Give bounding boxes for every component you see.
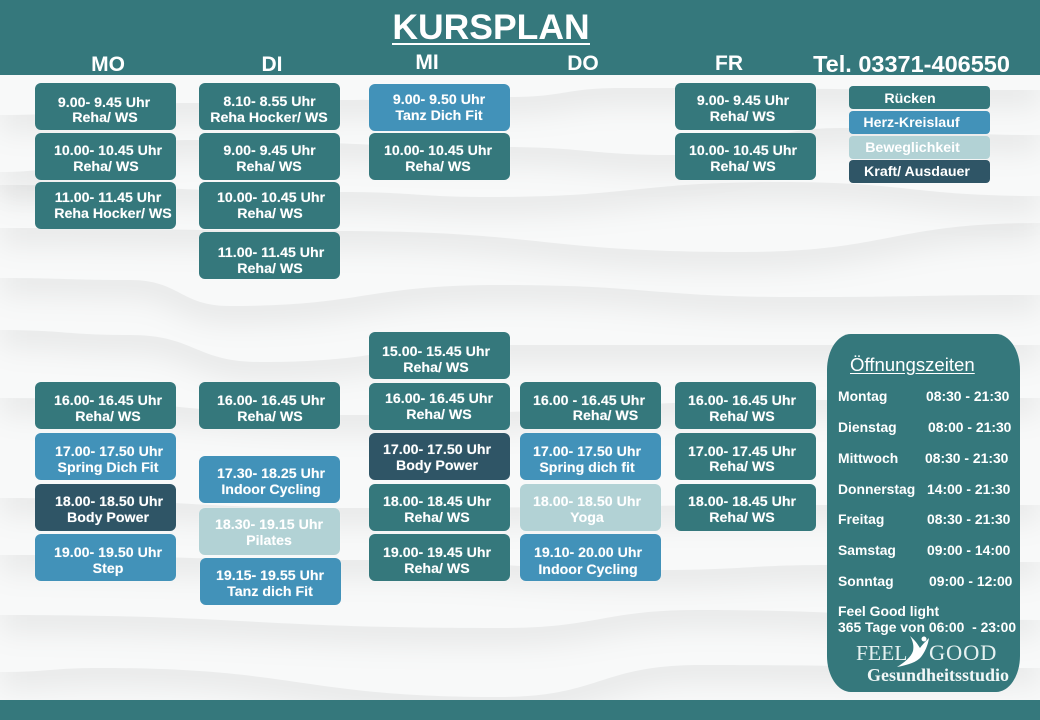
logo: Feel Good [856, 636, 1009, 685]
row: Dienstag [838, 419, 1011, 435]
card: Do 18.00 [520, 484, 660, 531]
card: Mo 19.00 [35, 534, 176, 581]
row: Mittwoch: Mittwoch [838, 450, 898, 466]
card: Mo 17.00: 17.00- 17.50 Uhr [55, 444, 163, 460]
card: Do 19.10: 19.10- 20.00 Uhr [534, 545, 642, 561]
card: Mo 9.00: Reha/ WS [72, 110, 138, 126]
row: Samstag: Samstag [838, 542, 896, 558]
card: Di 17.30 [199, 456, 340, 503]
legend: Kraft/ Ausdauer: Kraft/ Ausdauer [864, 164, 970, 180]
row: Freitag [838, 511, 1010, 527]
title: KURSPLAN [392, 7, 590, 47]
card: Fr 9.00 [675, 83, 816, 130]
card: Fr 16.00 [675, 382, 816, 429]
card: Fr 9.00: Reha/ WS [710, 109, 775, 125]
card: Mo 16.00 [35, 382, 176, 429]
card: Fr 18.00 [675, 484, 816, 531]
card: Mi 15.00: 15.00- 15.45 Uhr [382, 344, 490, 360]
card: Di 18.30: 18.30- 19.15 Uhr [215, 517, 323, 533]
legend: Kraft/ Ausdauer [849, 160, 990, 183]
card: Mi 9.00: 9.00- 9.50 Uhr [393, 92, 485, 108]
card: Di 11.00: 11.00- 11.45 Uhr [218, 245, 324, 261]
card: Mi 9.00 [369, 84, 510, 131]
card: Di 16.00 [198, 382, 340, 429]
logo subtitle: Gesundheitsstudio [867, 665, 1009, 685]
card: Do 17.00: Spring dich fit [539, 460, 635, 476]
card: Fr 16.00: Reha/ WS [709, 409, 775, 425]
card: Mi 10.00: 10.00- 10.45 Uhr [384, 143, 492, 159]
card: Mi 17.00: Body Power [396, 458, 478, 474]
card: Mi 10.00: Reha/ WS [405, 159, 471, 175]
row: Montag [838, 388, 1009, 404]
card: Fr 16.00: 16.00- 16.45 Uhr [688, 393, 796, 409]
card: Mi 18.00 [369, 484, 510, 531]
row: Donnerstag: Donnerstag [838, 481, 915, 497]
card: Do 19.10: Indoor Cycling [538, 562, 638, 578]
card: Mi 16.00 [369, 383, 510, 430]
card: Do 17.00: 17.00- 17.50 Uhr [533, 444, 641, 460]
heading: Montag: MO [91, 53, 125, 76]
row: Freitag: 08:30 - 21:30 [927, 511, 1010, 527]
card: Di 18.30 [199, 508, 340, 555]
card: Do 16.00: Reha/ WS [573, 408, 638, 424]
card: Mo 10.00 [35, 133, 176, 180]
card: Di 19.15 [200, 558, 341, 605]
card: Mi 17.00: 17.00- 17.50 Uhr [383, 442, 491, 458]
legend: Beweglichkeit: Beweglichkeit [865, 140, 960, 156]
legend: Herz-Kreislauf: Herz-Kreislauf [863, 115, 960, 131]
card: Fr 17.00 [675, 433, 816, 480]
card: Mo 17.00 [35, 433, 176, 480]
card: Fr 18.00: Reha/ WS [709, 510, 775, 526]
card: Fr 10.00: Reha/ WS [710, 159, 776, 175]
row: Mittwoch [838, 450, 1008, 466]
card: Fr 17.00: 17.00- 17.45 Uhr [688, 444, 796, 460]
note: Feel Good light: Feel Good light [838, 603, 939, 619]
card: Mo 11.00: Reha Hocker/ WS [54, 206, 172, 222]
legend: Beweglichkeit [849, 136, 990, 158]
footer band [0, 700, 1040, 720]
heading: Freitag: FR [715, 52, 743, 75]
card: Mi 18.00: 18.00- 18.45 Uhr [383, 494, 491, 510]
card: Di 19.15: Tanz dich Fit [227, 584, 313, 600]
row: Freitag: Freitag [838, 511, 884, 527]
card: Mi 18.00: Reha/ WS [404, 510, 470, 526]
card: Mi 19.00: 19.00- 19.45 Uhr [383, 545, 491, 561]
row: Montag: Montag [838, 388, 887, 404]
card: Di 9.00: 9.00- 9.45 Uhr [223, 143, 316, 159]
card: Di 11.00: Reha/ WS [237, 261, 303, 277]
card: Di 19.15: 19.15- 19.55 Uhr [216, 568, 324, 584]
note: Feel Good light [838, 603, 1016, 635]
row: Dienstag: 08:00 - 21:30 [928, 419, 1011, 435]
row: Montag: 08:30 - 21:30 [926, 388, 1009, 404]
card: Di 10.00: 10.00- 10.45 Uhr [217, 190, 325, 206]
row: Sonntag: 09:00 - 12:00 [929, 573, 1012, 589]
card: Mo 10.00: Reha/ WS [73, 159, 139, 175]
row: Samstag [838, 542, 1010, 558]
card: Fr 10.00 [675, 133, 816, 180]
card: Di 18.30: Pilates [246, 533, 292, 549]
card: Mi 10.00 [369, 133, 510, 180]
card: Mo 18.00 [35, 484, 176, 531]
legend: Herz-Kreislauf [849, 111, 990, 134]
card: Di 9.00 [198, 133, 340, 180]
card: Di 16.00: Reha/ WS [237, 409, 303, 425]
icon: leaping figure [897, 636, 929, 667]
card: Mo 17.00: Spring Dich Fit [58, 460, 158, 476]
card: Di 9.00: Reha/ WS [236, 159, 302, 175]
card: Mi 15.00: Reha/ WS [403, 360, 469, 376]
card: Di 17.30: 17.30- 18.25 Uhr [217, 466, 325, 482]
card: Di 8.10 [198, 83, 340, 130]
card: Di 8.10: Reha Hocker/ WS [210, 110, 328, 126]
logo wordmark right: GOOD [929, 640, 997, 665]
panel heading: Öffnungszeiten [850, 354, 975, 375]
card: Mo 18.00: 18.00- 18.50 Uhr [55, 494, 163, 510]
heading: Donnerstag: DO [567, 52, 599, 75]
panel: opening hours [827, 334, 1020, 692]
card: Do 18.00: Yoga [570, 510, 604, 526]
logo wordmark left: FEEL [856, 641, 907, 665]
card: Mo 11.00 [35, 182, 176, 229]
card: Mo 16.00: Reha/ WS [75, 409, 141, 425]
card: Di 10.00: Reha/ WS [237, 206, 303, 222]
card: Do 16.00 [520, 382, 660, 429]
row: Donnerstag [838, 481, 1010, 497]
card: Fr 10.00: 10.00- 10.45 Uhr [689, 143, 797, 159]
card: Mo 16.00: 16.00- 16.45 Uhr [54, 393, 162, 409]
card: Di 17.30: Indoor Cycling [221, 482, 321, 498]
card: Mi 17.00 [369, 433, 510, 480]
card: Do 19.10 [520, 534, 660, 581]
card: Mo 9.00: 9.00- 9.45 Uhr [58, 95, 150, 111]
card: Mi 9.00: Tanz Dich Fit [395, 108, 483, 124]
card: Mi 16.00: 16.00- 16.45 Uhr [385, 391, 493, 407]
card: Do 18.00: 18.00- 18.50 Uhr [533, 494, 641, 510]
card: Mi 16.00: Reha/ WS [406, 407, 472, 423]
card: Fr 9.00: 9.00- 9.45 Uhr [697, 93, 789, 109]
heading: Mittwoch: MI [415, 51, 439, 74]
card: Mo 11.00: 11.00- 11.45 Uhr [55, 190, 161, 206]
card: Di 16.00: 16.00- 16.45 Uhr [217, 393, 325, 409]
card: Di 11.00 [198, 232, 340, 279]
phone number: Tel. 03371-406550 [813, 51, 1010, 77]
note: Feel Good light: 365 Tage von 06:00 - 23:00 [838, 618, 1016, 634]
card: Mo 19.00: Step [93, 561, 123, 577]
legend: Rücken: Rücken [884, 91, 936, 107]
card: Mo 19.00: 19.00- 19.50 Uhr [54, 545, 162, 561]
heading: Dienstag: DI [262, 53, 282, 76]
row: Donnerstag: 14:00 - 21:30 [927, 481, 1010, 497]
row: Dienstag: Dienstag [838, 419, 897, 435]
card: Mo 10.00: 10.00- 10.45 Uhr [54, 143, 162, 159]
card: Do 16.00: 16.00 - 16.45 Uhr [533, 393, 645, 409]
card: Di 10.00 [198, 182, 340, 229]
card: Mo 9.00 [35, 83, 176, 130]
row: Sonntag [838, 573, 1012, 589]
row: Mittwoch: 08:30 - 21:30 [925, 450, 1008, 466]
row: Sonntag: Sonntag [838, 573, 894, 589]
legend: Rücken [849, 86, 990, 109]
card: Fr 17.00: Reha/ WS [709, 459, 775, 475]
card: Fr 18.00: 18.00- 18.45 Uhr [688, 494, 796, 510]
card: Mo 18.00: Body Power [67, 510, 149, 526]
row: Samstag: 09:00 - 14:00 [927, 542, 1010, 558]
card: Do 17.00 [520, 433, 660, 480]
card: Di 8.10: 8.10- 8.55 Uhr [223, 94, 316, 110]
card: Mi 15.00 [369, 332, 510, 379]
card: Mi 19.00: Reha/ WS [404, 561, 470, 577]
header band [0, 0, 1040, 75]
card: Mi 19.00 [369, 534, 510, 581]
